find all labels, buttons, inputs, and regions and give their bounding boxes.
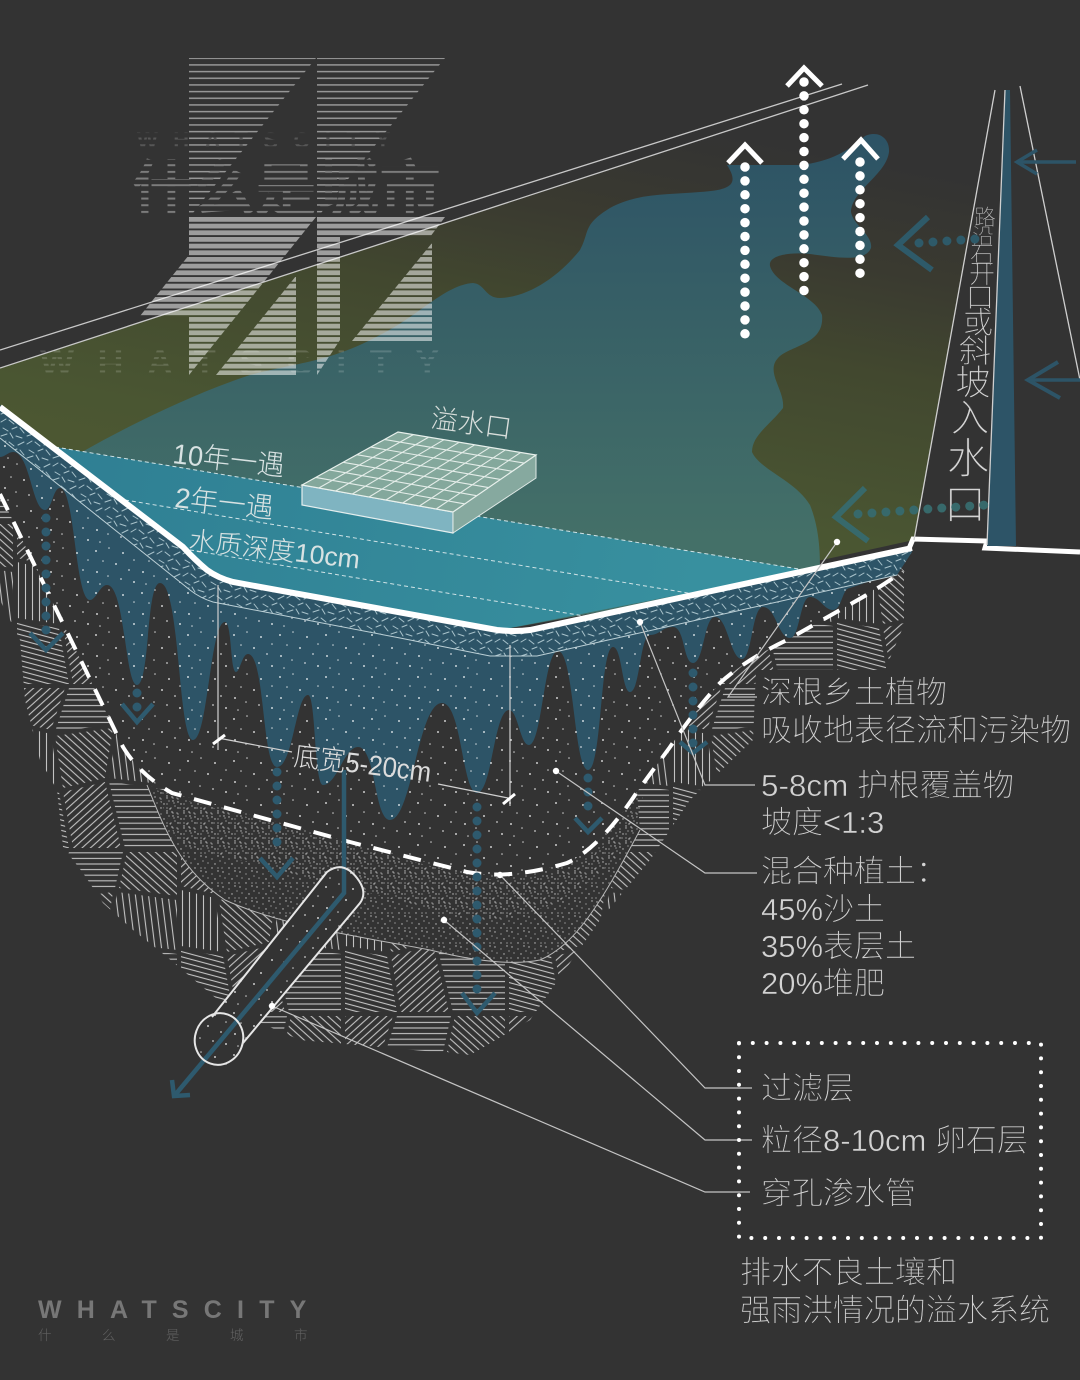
planting soil body (dark mix area) [0,430,912,875]
watermark: striped Chinese name: 什么是城市 [131,156,441,225]
label: 2-year storm: 2年一遇 [173,482,275,524]
footer logo: 城 [230,1328,244,1343]
label: planting soil mix: 35%表层土 [761,929,916,964]
vertical label: curb opening or slope inlet: 沿 [972,224,994,249]
label: deep-rooted native plants: 吸收地表径流和污染物 [761,713,1071,748]
vertical label: curb opening or slope inlet [944,205,996,528]
ponded teal runoff area [55,134,889,630]
bottom width dimension [213,585,515,806]
vertical label: curb opening or slope inlet: 水 [947,435,989,482]
leader lines with dots [269,539,840,1192]
surface white edge line [0,407,912,631]
vertical label: curb opening or slope inlet: 或 [963,307,993,340]
caption: overflow system: 排水不良土壤和 [740,1255,957,1290]
perforated drain pipe [172,770,363,1096]
watermark logo [40,58,463,383]
watermark: upper striped mark [189,58,445,218]
vertical label: curb opening or slope inlet: 开 [969,259,995,289]
label: planting soil mix [761,854,947,1001]
footer logo: 么 [102,1328,116,1343]
infiltration drips [0,430,912,820]
label: deep-rooted native plants: 深根乡土植物 [761,675,947,710]
label: water quality depth: 水质深度10cm [187,525,362,574]
road dark wedge with curb lines [914,86,1080,546]
vertical label: curb opening or slope inlet: 口 [944,481,986,528]
gravel layer [147,785,643,962]
vertical label: curb opening or slope inlet: 口 [966,282,994,313]
dotted overflow system box [739,1043,1041,1238]
label: 10-year storm: 10年一遇 [171,438,286,482]
vertical label: curb opening or slope inlet: 斜 [959,333,991,369]
hatched native soil [0,430,904,1055]
label: deep-rooted native plants [761,675,1071,748]
watermark: large WHATSCITY: WHATSCITY [40,342,463,383]
vertical label: curb opening or slope inlet: 入 [951,398,989,440]
label: planting soil mix: 混合种植土： [761,854,947,889]
label: perforated pipe: 穿孔渗水管 [761,1176,916,1211]
footer logo: 什 [38,1328,52,1343]
label: mulch: 坡度<1:3 [761,805,884,840]
water level dashed lines [55,447,805,617]
footer logo [38,1296,322,1343]
bottom width dimension: 底宽5-20cm [292,740,433,788]
soil dots [0,430,912,875]
filter layer dashed line [0,494,903,875]
caption: overflow system [740,1255,1050,1328]
watermark: small WHATSCITY: WHATSCITY [137,128,406,153]
ground surface: olive lawn plane [0,85,995,630]
label: gravel layer: 粒径8-10cm 卵石层 [761,1123,1028,1158]
water body [55,447,805,630]
arrows: inflow from curb [836,150,1080,541]
curb profile [908,539,1080,552]
curb top edge lines [0,84,868,368]
caption: overflow system: 强雨洪情况的溢水系统 [740,1293,1050,1328]
vertical label: curb opening or slope inlet: 路 [974,205,996,230]
label: overflow inlet: 溢水口 [429,403,514,444]
mulch layer [0,405,912,656]
vertical label: curb opening or slope inlet: 石 [970,242,994,269]
footer logo: 是 [166,1328,180,1343]
footer logo: WHATSCITY [38,1296,322,1324]
label: filter layer: 过滤层 [761,1071,854,1106]
label: planting soil mix: 45%沙土 [761,892,885,927]
vertical label: curb opening or slope inlet: 坡 [955,364,991,403]
label: planting soil mix: 20%堆肥 [761,966,885,1001]
footer logo: 市 [294,1328,308,1343]
label: mulch [761,768,1014,840]
arrows: upward white dotted evaporation [728,68,878,336]
overflow grate box [302,432,536,533]
watermark: lower striped mark [140,217,445,375]
label: mulch: 5-8cm 护根覆盖物 [761,768,1014,803]
arrows: downward infiltration [30,518,707,1013]
